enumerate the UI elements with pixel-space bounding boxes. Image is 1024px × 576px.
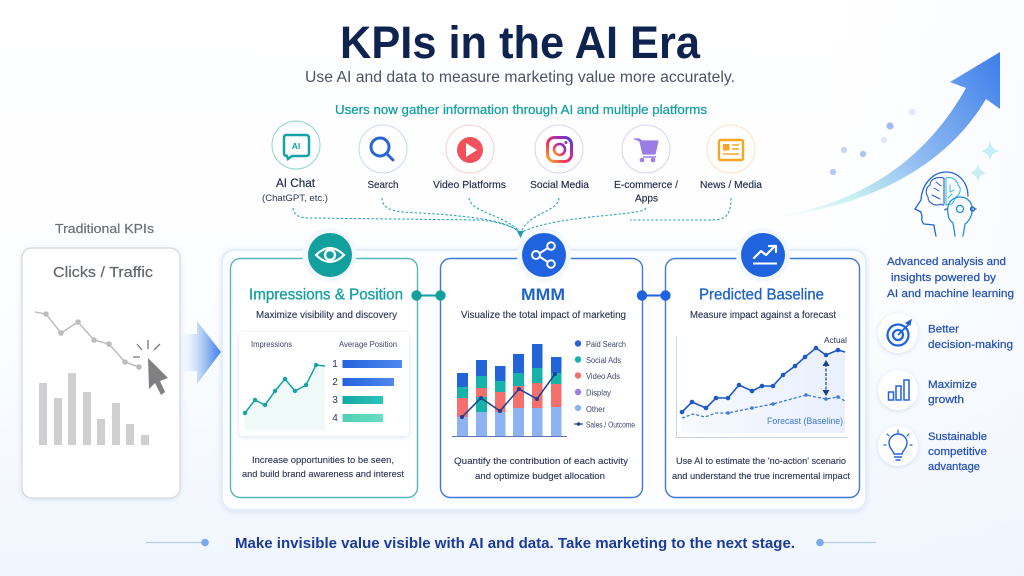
callout: advanced analysis: Advanced analysis and — [887, 256, 1006, 268]
chart: impressions and average position: Average Position — [339, 339, 397, 349]
description: Use AI to estimate the 'no-action' scenario — [676, 456, 846, 467]
panel: MMM — [440, 228, 642, 498]
chart: impressions and average position: 3 — [332, 395, 338, 406]
forecast line chart: Forecast (Baseline) — [767, 416, 843, 426]
panel: traditional KPIs — [22, 221, 180, 498]
platforms heading: Users now gather information through AI and multiple platforms — [335, 102, 708, 117]
icon: trend chart — [736, 228, 790, 282]
platform: AI Chat: (ChatGPT, etc.) — [262, 193, 328, 204]
heading: Impressions & Position — [249, 286, 403, 304]
traffic bars — [39, 373, 149, 445]
icon: cursor click — [133, 340, 168, 395]
connector: impressions to MMM — [411, 290, 446, 301]
subheading: Measure impact against a forecast — [690, 310, 836, 321]
subheading: Maximize visibility and discovery — [256, 310, 397, 321]
callout: advanced analysis: insights powered by — [891, 272, 997, 284]
chart: impressions and average position: Impressions — [251, 339, 292, 349]
chart: impressions and average position: 4 — [332, 413, 338, 424]
chart: impressions and average position — [239, 332, 409, 436]
platform: Social Media: Social Media — [530, 179, 589, 191]
growth arrow — [770, 52, 1000, 218]
benefit: sustainable competitive advantage: advantage — [928, 461, 980, 473]
platform: Video Platforms: Video Platforms — [433, 179, 506, 191]
platform: AI Chat: AI Chat — [276, 178, 316, 190]
platform: News / Media: News / Media — [700, 179, 762, 191]
platform: Search: Search — [368, 179, 399, 191]
forecast line chart — [676, 335, 848, 438]
chart: impressions and average position: 2 — [332, 377, 338, 388]
benefit: maximize growth — [878, 370, 977, 410]
description: and optimize budget allocation — [475, 471, 605, 482]
legend: Social Ads — [586, 356, 621, 365]
platform: News / Media — [700, 125, 762, 191]
benefit: sustainable competitive advantage — [878, 426, 987, 473]
title: KPIs in the AI Era — [340, 17, 701, 68]
legend: Display — [586, 388, 611, 398]
description — [672, 456, 850, 482]
platform: E-commerce / Apps — [614, 125, 678, 204]
stacked bar chart — [452, 344, 567, 436]
connector: MMM to baseline — [637, 290, 671, 301]
heading: Predicted Baseline — [699, 286, 824, 304]
icon: share nodes — [517, 228, 571, 282]
description: Increase opportunities to be seen, — [252, 455, 394, 466]
legend: Paid Search — [586, 340, 626, 349]
platform: AI Chat: AI — [292, 141, 300, 151]
panel: traditional KPIs: Clicks / Traffic — [53, 264, 154, 281]
callout: advanced analysis: AI and machine learning — [887, 288, 1014, 300]
benefit: maximize growth: growth — [928, 394, 964, 406]
description — [454, 456, 628, 482]
subtitle: Use AI and data to measure marketing value more accurately. — [305, 69, 735, 86]
icon: AI brain and head — [915, 172, 976, 236]
benefit: maximize growth: Maximize — [928, 379, 977, 391]
subheading: Visualize the total impact of marketing — [461, 310, 626, 321]
traffic line — [35, 311, 142, 370]
platform: Social Media — [530, 125, 589, 191]
description: Quantify the contribution of each activity — [454, 456, 628, 467]
platform: Video Platforms — [433, 125, 506, 191]
panel: Predicted Baseline — [666, 228, 860, 498]
benefit: better decision-making: Better — [928, 324, 959, 336]
forecast line chart: Actual — [824, 335, 847, 345]
chart: impressions and average position: 1 — [332, 359, 338, 370]
dashed connectors from platforms to MMM — [293, 198, 731, 232]
legend: Video Ads — [586, 372, 620, 381]
legend: Other — [586, 405, 605, 414]
platform: Search — [359, 125, 407, 191]
legend — [574, 340, 635, 430]
description: and understand the true incremental impact — [672, 471, 850, 482]
outer container — [222, 250, 866, 510]
legend: Sales / Outcome — [586, 420, 635, 430]
benefit: sustainable competitive advantage: Sustainable — [928, 431, 987, 443]
description: and build brand awareness and interest — [242, 469, 404, 480]
icon: eye — [302, 228, 356, 282]
platform: AI Chat — [262, 121, 328, 204]
platform: E-commerce / Apps: E-commerce / — [614, 179, 678, 191]
benefit: better decision-making: decision-making — [928, 339, 1013, 351]
closing message: Make invisible value visible with AI and data. Take marketing to the next stage. — [235, 535, 795, 552]
benefit: sustainable competitive advantage: competitive — [928, 446, 987, 458]
callout: advanced analysis — [887, 256, 1014, 300]
arrow: traditional to new KPIs — [183, 321, 221, 384]
platform: E-commerce / Apps: Apps — [635, 192, 658, 204]
description — [242, 455, 404, 480]
heading: MMM — [521, 285, 565, 304]
arrowhead into MMM — [517, 231, 524, 238]
benefit: better decision-making — [878, 313, 1013, 353]
panel: Impressions & Position — [230, 228, 418, 498]
panel: traditional KPIs: Traditional KPIs — [55, 221, 155, 236]
